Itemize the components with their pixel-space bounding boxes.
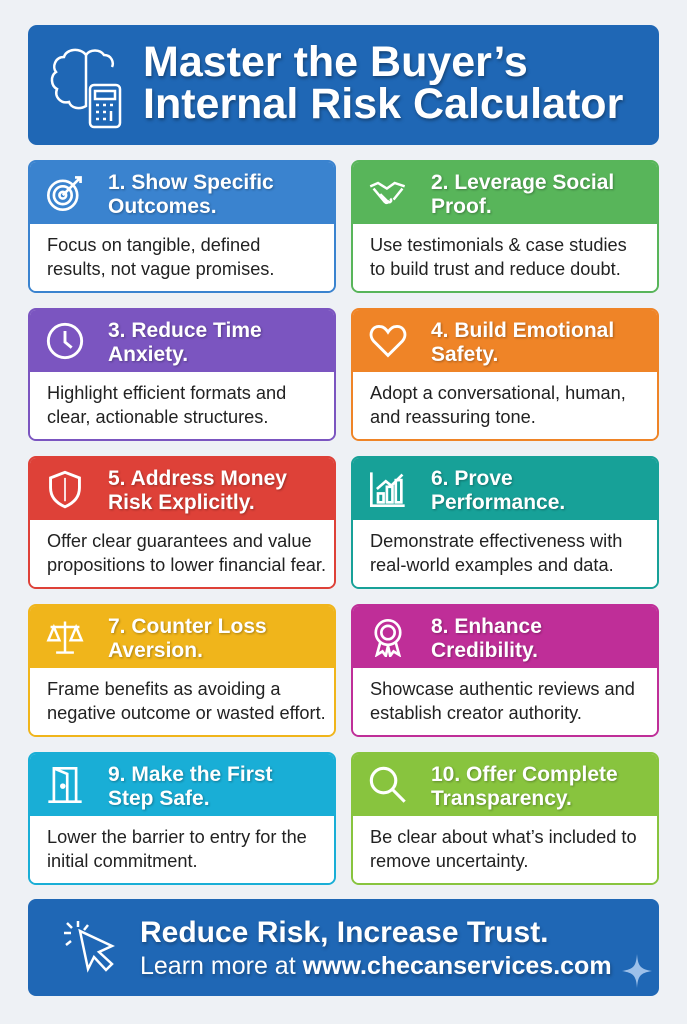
panel: 8: Credibility. (431, 639, 538, 662)
icon: magnifier (370, 766, 406, 803)
panel: 8: establish creator authority. (370, 703, 582, 723)
footer text (140, 916, 612, 980)
title text: Master the Buyer’s (143, 38, 528, 86)
panel: 9: initial commitment. (47, 851, 198, 871)
footer banner (28, 899, 659, 996)
panel: 2 (351, 160, 659, 293)
panel: 9 (28, 752, 336, 885)
panel: 10: Transparency. (431, 787, 572, 810)
panel: 1: Focus on tangible, defined (47, 235, 260, 255)
title banner (28, 25, 659, 145)
panel: 6: Performance. (431, 491, 565, 514)
panel: 7: Aversion. (108, 639, 203, 662)
panel: 7: negative outcome or wasted effort. (47, 703, 326, 723)
panel: 4 (351, 308, 659, 441)
panel: 10: Be clear about what’s included to (370, 827, 637, 847)
panel: 8: 8. Enhance (431, 615, 542, 638)
panel: 2: to build trust and reduce doubt. (370, 259, 621, 279)
panel: 9: Lower the barrier to entry for the (47, 827, 307, 847)
decorative sparkle (622, 954, 652, 988)
panel: 3: 3. Reduce Time (108, 319, 262, 342)
title text: Internal Risk Calculator (143, 80, 623, 128)
icon: cursor click (64, 921, 115, 973)
panel: 8: Showcase authentic reviews and (370, 679, 635, 699)
panel: 1: results, not vague promises. (47, 259, 274, 279)
panel: 6: Demonstrate effectiveness with (370, 531, 622, 551)
icon: target (47, 176, 82, 211)
panel: 7: 7. Counter Loss (108, 615, 267, 638)
panel: 7 (28, 604, 336, 737)
panel: 1: Outcomes. (108, 195, 217, 218)
panel: 6: real-world examples and data. (370, 555, 614, 575)
panel: 10: remove uncertainty. (370, 851, 528, 871)
panel: 5 (28, 456, 336, 589)
panel: 10: 10. Offer Complete (431, 763, 618, 786)
icon: heart (370, 325, 406, 358)
panel: 9: Step Safe. (108, 787, 210, 810)
panel: 1 (28, 160, 336, 293)
panel: 3 (28, 308, 336, 441)
panel: 10 (351, 752, 659, 885)
icon: badge (374, 619, 402, 657)
panel: 4: Adopt a conversational, human, (370, 383, 626, 403)
panel: 2: 2. Leverage Social (431, 171, 614, 194)
panel: 6: 6. Prove (431, 467, 513, 490)
panel: 4: Safety. (431, 343, 498, 366)
panel: 9: 9. Make the First (108, 763, 273, 786)
panel: 2: Proof. (431, 195, 492, 218)
panel: 3: clear, actionable structures. (47, 407, 268, 427)
panel: 5: propositions to lower financial fear. (47, 555, 326, 575)
panel: 2: Use testimonials & case studies (370, 235, 627, 255)
panel: 8 (351, 604, 659, 737)
icon: handshake (370, 182, 405, 204)
panel: 5: Offer clear guarantees and value (47, 531, 312, 551)
panel: 3: Highlight efficient formats and (47, 383, 286, 403)
panel: 4: and reassuring tone. (370, 407, 536, 427)
panel: 3: Anxiety. (108, 343, 188, 366)
icon: door (48, 767, 82, 803)
icon: clock (46, 322, 84, 360)
panel: 4: 4. Build Emotional (431, 319, 614, 342)
icon: scales (46, 622, 84, 654)
icon: brain calculator (50, 48, 122, 128)
icon: shield (49, 470, 81, 508)
icon: chart (370, 472, 405, 507)
title text (143, 38, 626, 128)
panel: 5: Risk Explicitly. (108, 491, 255, 514)
footer text: Reduce Risk, Increase Trust. (140, 916, 549, 949)
panel: 7: Frame benefits as avoiding a (47, 679, 281, 699)
panel: 1: 1. Show Specific (108, 171, 274, 194)
panel: 6 (351, 456, 659, 589)
footer text: Learn more at www.checanservices.com (140, 952, 612, 980)
panel: 5: 5. Address Money (108, 467, 287, 490)
